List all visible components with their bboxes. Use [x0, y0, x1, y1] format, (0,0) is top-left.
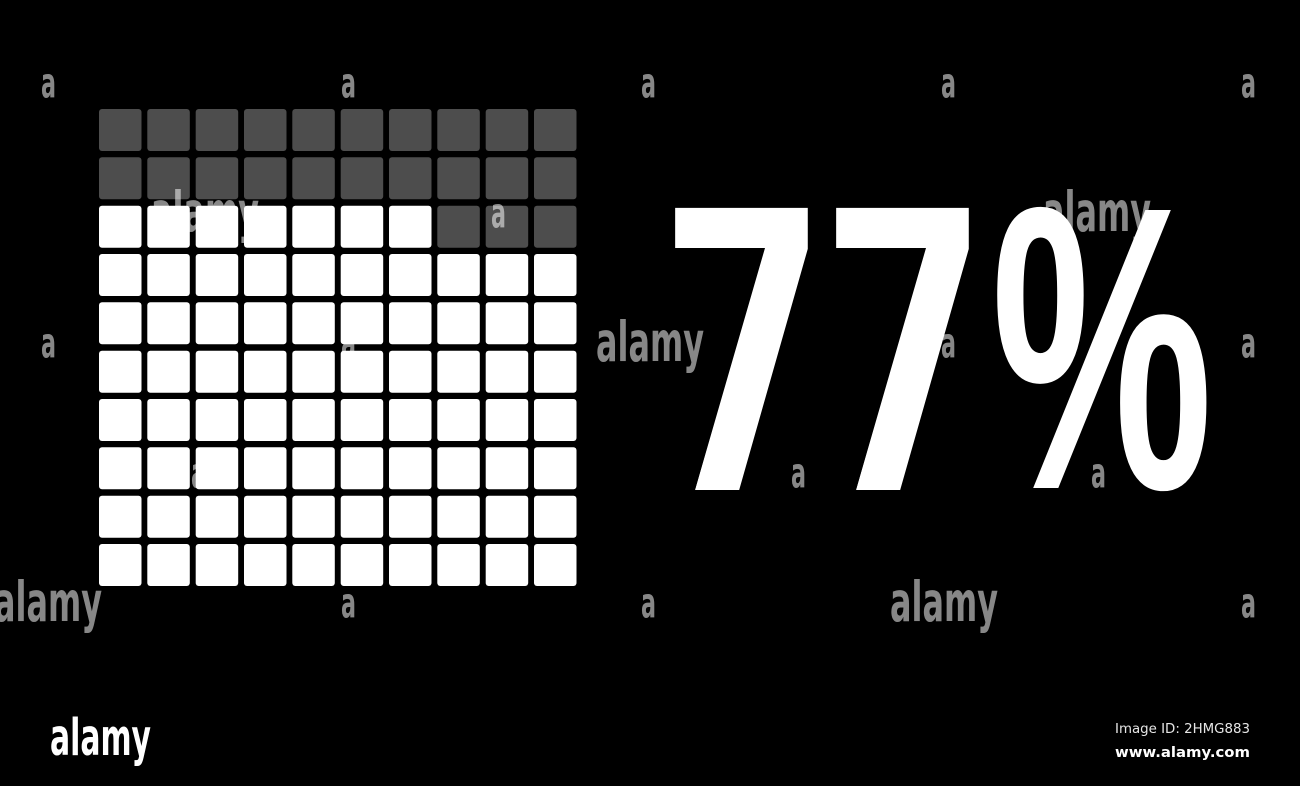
watermark: repeated stock-photo marks: alamy: [596, 310, 704, 375]
percentage value: 77%: 7: [659, 132, 827, 582]
watermark: repeated stock-photo marks: alamy: [890, 570, 998, 635]
logo: alamy: alamy: [50, 709, 151, 768]
watermark: repeated stock-photo marks: a: [641, 58, 656, 108]
watermark: repeated stock-photo marks: a: [1241, 58, 1256, 108]
watermark: repeated stock-photo marks: a: [491, 188, 506, 238]
watermark: repeated stock-photo marks: a: [1091, 448, 1106, 498]
filled cells: [99, 206, 576, 586]
watermark: repeated stock-photo marks: [0, 58, 1256, 635]
watermark: repeated stock-photo marks: a: [1241, 318, 1256, 368]
watermark: repeated stock-photo marks: a: [941, 318, 956, 368]
watermark: repeated stock-photo marks: a: [1241, 578, 1256, 628]
watermark: repeated stock-photo marks: alamy: [1043, 180, 1151, 245]
watermark: repeated stock-photo marks: a: [641, 578, 656, 628]
watermark: repeated stock-photo marks: a: [791, 448, 806, 498]
image ID: Image ID: 2HMG883: [1115, 722, 1250, 737]
watermark: repeated stock-photo marks: a: [941, 58, 956, 108]
unfilled cells: [99, 109, 576, 248]
watermark: repeated stock-photo marks: a: [41, 58, 56, 108]
watermark: repeated stock-photo marks: a: [341, 318, 356, 368]
watermark: repeated stock-photo marks: a: [41, 318, 56, 368]
watermark: repeated stock-photo marks: alamy: [151, 180, 259, 245]
percentage value: 77%: 7: [820, 132, 988, 582]
watermark: repeated stock-photo marks: a: [341, 58, 356, 108]
watermark: repeated stock-photo marks: a: [191, 448, 206, 498]
waffle chart: 77 of 100 cells filled: [99, 109, 576, 586]
watermark: repeated stock-photo marks: a: [341, 578, 356, 628]
percentage value: 77%: [675, 206, 1206, 492]
website URL: www.alamy.com: [1115, 745, 1250, 761]
